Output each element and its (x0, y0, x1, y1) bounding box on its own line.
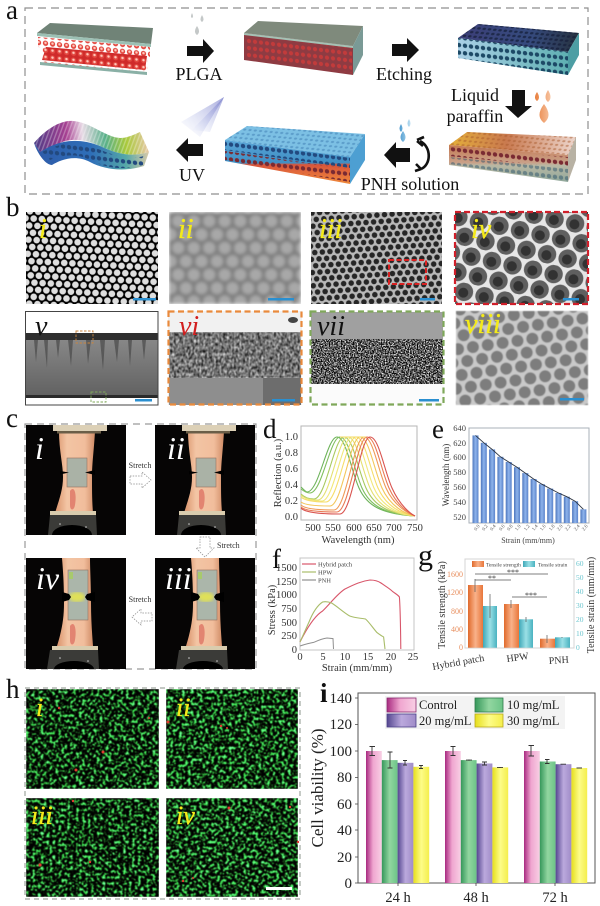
wavelength axis tick labels: 600 (453, 452, 466, 462)
left axis title: Tensile strength (kPa) (437, 561, 448, 649)
left axis tick labels: 1200 (447, 588, 463, 597)
right axis tick labels: 50 (576, 573, 584, 582)
viability legend (385, 696, 565, 729)
reflection axis tick labels: 1.0 (285, 432, 298, 443)
fluorescence image iii: iii (31, 801, 53, 830)
tensile legend: Tensile strength (486, 562, 521, 568)
error bars (370, 746, 582, 768)
x axis title: Strain (mm/mm) (501, 536, 555, 545)
significance markers: *** (507, 568, 519, 577)
time axis labels: 24 h (385, 890, 411, 906)
reflection axis tick labels: 0.4 (285, 480, 299, 491)
icon: paraffin drops (535, 90, 550, 123)
panel d label: d (263, 414, 277, 444)
photo i: i (35, 430, 44, 466)
arrow: liquid paraffin step (505, 90, 532, 118)
wavelength axis tick labels: 750 (407, 523, 423, 534)
strain axis tick labels: 1.8 (549, 524, 557, 532)
wavelength bars (472, 435, 586, 523)
reflection plot frame (301, 426, 417, 520)
viability axis tick labels: 80 (337, 770, 352, 786)
panel a dashed frame (25, 8, 588, 194)
schematic: opal template sandwich (37, 23, 153, 75)
icon: UV light rays (181, 97, 224, 137)
photo ii: ii (167, 430, 185, 466)
strain axis tick labels: 0.8 (507, 524, 515, 532)
label: PLGA: PLGA (175, 64, 223, 84)
arrow: PNH solution step (384, 142, 410, 168)
strain axis tick labels: 1.4 (532, 524, 540, 532)
time axis labels: 72 h (542, 890, 568, 906)
right axis tick labels: 30 (576, 601, 584, 610)
SEM image iv (455, 212, 588, 304)
stress legend: HPW (318, 570, 333, 576)
viability axis tick labels: 60 (337, 797, 352, 813)
SEM image i (26, 212, 158, 304)
significance markers: ** (488, 574, 496, 583)
strain axis tick labels: 25 (408, 652, 418, 663)
panel a: fabrication schematic (6, 0, 588, 194)
panel g label: g (418, 539, 433, 572)
right axis title: Tensile strain (mm/mm) (586, 557, 597, 653)
icon: PNH drops (400, 119, 410, 142)
reflection axis tick labels (285, 432, 299, 523)
PNH curve (300, 638, 334, 649)
icon: circular arrow (415, 137, 429, 171)
reflection axis tick labels: 0.2 (285, 496, 298, 507)
x axis title: Wavelength (nm) (322, 535, 395, 546)
wavelength axis tick labels: 550 (325, 523, 341, 534)
icon: PLGA drops (191, 13, 204, 35)
schematic: hybrid film (225, 126, 365, 184)
stress axis tick labels: 750 (281, 604, 297, 615)
viability axis tick labels: 140 (330, 691, 352, 707)
panel f label: f (272, 544, 281, 574)
stress axis tick labels (276, 563, 297, 656)
panel i: cell viability bar chart (308, 678, 595, 906)
SEM image i: i (39, 214, 47, 245)
label: Etching: Etching (376, 64, 432, 84)
y axis title: Stress (kPa) (267, 584, 278, 635)
SEM image ii: ii (178, 214, 194, 245)
significance markers (475, 568, 548, 600)
viability axis tick labels: 120 (330, 717, 352, 733)
tensile plot frame (465, 559, 574, 648)
panel h: live dead staining (6, 674, 300, 899)
arrow: PLGA step (187, 39, 214, 63)
y axis title: Wavelength (nm) (441, 444, 451, 506)
schematic: bent structural colour film (34, 121, 149, 169)
stretch label and arrow: i to ii: Stretch (129, 461, 151, 470)
SEM image viii (456, 309, 588, 405)
SEM image v: cross section: v (35, 311, 48, 342)
y axis title: Reflection (a.u.) (273, 438, 284, 507)
viability axis tick labels: 100 (330, 744, 352, 760)
reflection axis tick labels: 0.8 (285, 448, 298, 459)
wavelength axis tick labels: 520 (453, 512, 466, 522)
reflection axis tick labels: 0.6 (285, 464, 298, 475)
panel e label: e (432, 414, 444, 444)
strain axis tick labels: 10 (340, 652, 350, 663)
label: PNH solution: PNH solution (361, 174, 459, 194)
wavelength axis tick labels: 540 (453, 497, 466, 507)
right axis tick labels (576, 559, 584, 652)
SEM image vii: lower layer detail: vii (317, 311, 345, 342)
viability axis ticks (355, 698, 555, 886)
strain axis tick labels: 2.6 (582, 524, 590, 532)
strain axis tick labels: 20 (386, 652, 396, 663)
strain axis tick labels (297, 652, 418, 663)
schematic: paraffin filled film (449, 132, 576, 182)
photo ii (155, 425, 255, 535)
strain axis tick labels: 2.4 (574, 524, 582, 532)
SEM image v: cross section (26, 311, 158, 405)
left axis tick labels (447, 570, 463, 652)
bars 72 h (524, 751, 587, 883)
strain axis tick labels: 0.0 (474, 524, 482, 532)
strain axis tick labels: 2.0 (557, 524, 565, 532)
category labels (432, 651, 569, 673)
stretch label and arrow: i to ii (129, 461, 151, 488)
left axis tick labels: 800 (451, 607, 463, 616)
viability legend: 10 mg/mL (507, 698, 559, 712)
right axis tick labels: 10 (576, 629, 584, 638)
panel i label: i (320, 678, 328, 708)
photo iii: iii (165, 560, 192, 596)
photo iv: iv (36, 560, 60, 596)
HPW curve (300, 602, 385, 649)
right axis tick labels: 40 (576, 587, 584, 596)
panel g: tensile bar chart (418, 539, 597, 673)
arrow: etching step (392, 38, 419, 62)
panel b label: b (6, 192, 20, 222)
wavelength axis tick labels: 560 (453, 482, 466, 492)
strain axis tick labels: 0.6 (499, 524, 507, 532)
reflection axis tick labels: 0.0 (285, 512, 298, 523)
time axis labels: 48 h (463, 890, 489, 906)
right axis tick labels: 0 (576, 643, 580, 652)
category labels: HPW (506, 651, 530, 665)
wavelength axis tick labels: 650 (366, 523, 382, 534)
panel e: wavelength bar chart (432, 414, 590, 545)
stress axis tick labels: 1250 (276, 577, 297, 588)
panel c label: c (6, 403, 18, 433)
left axis tick labels: 1600 (447, 570, 463, 579)
wavelength axis tick labels: 600 (346, 523, 362, 534)
SEM image iii: iii (319, 214, 342, 245)
viability axis tick labels: 20 (337, 850, 352, 866)
stress plot frame (300, 558, 414, 650)
fluorescence image iv: iv (176, 801, 195, 830)
strain axis tick labels: 0.2 (482, 524, 490, 532)
SEM image iv: iv (471, 214, 492, 245)
photo iv (26, 558, 126, 669)
label: Liquid paraffin: Liquid (451, 85, 499, 105)
fluorescence image i: i (36, 693, 43, 722)
y axis title: Cell viability (%) (308, 729, 327, 847)
schematic: infiltrated template (244, 21, 363, 75)
stress axis tick labels: 0 (292, 645, 297, 656)
significance markers: *** (525, 591, 537, 600)
wavelength axis tick labels (453, 423, 466, 522)
fluorescence image iv (166, 798, 299, 897)
wavelength axis tick labels (305, 523, 423, 534)
category labels: Hybrid patch (432, 653, 485, 673)
left axis tick labels: 0 (459, 643, 463, 652)
tensile legend (472, 561, 568, 568)
viability legend: Control (419, 698, 458, 712)
schematic: inverse opal film (458, 24, 579, 75)
x axis title: Strain (mm/mm) (322, 663, 393, 674)
stress axis tick labels: 1500 (276, 563, 297, 574)
stress legend (302, 562, 353, 584)
stress axis tick labels: 1000 (276, 590, 297, 601)
SEM image vi: upper layer detail: vi (179, 311, 199, 342)
wavelength axis tick labels: 620 (453, 438, 466, 448)
SEM image ii (169, 212, 301, 304)
strain axis tick labels (474, 524, 590, 532)
panel b: electron microscopy images (6, 192, 588, 405)
viability axis tick labels (330, 691, 352, 892)
panel h dashed frame (25, 688, 300, 899)
fluorescence image i (26, 689, 159, 789)
SEM image iii (311, 212, 442, 304)
stretch label and arrow: ii to iii (196, 537, 240, 557)
SEM image vi: upper layer detail (168, 311, 302, 405)
strain axis tick labels: 15 (363, 652, 373, 663)
category labels: PNH (548, 655, 569, 667)
stretch label and arrow: iii to iv: Stretch (129, 595, 151, 604)
stress legend: Hybrid patch (318, 562, 353, 568)
stress axis tick labels: 500 (281, 618, 297, 629)
strain axis tick labels: 2.2 (565, 524, 573, 532)
wavelength trend line (476, 435, 583, 509)
SEM image vii: lower layer detail (310, 311, 444, 405)
spectra curves (301, 437, 415, 516)
SEM image viii: viii (465, 309, 501, 340)
label: UV: UV (179, 165, 205, 185)
wavelength axis tick labels: 500 (305, 523, 321, 534)
hybrid patch curve (300, 580, 401, 649)
tensile bars (468, 585, 570, 648)
right axis tick labels: 20 (576, 615, 584, 624)
strain axis tick labels: 1.0 (515, 524, 523, 532)
viability legend: 20 mg/mL (419, 714, 471, 728)
strain axis tick labels: 0.4 (490, 524, 498, 532)
bars 24 h (366, 751, 429, 883)
strain axis tick labels: 0 (297, 652, 303, 663)
fluorescence image ii: ii (176, 693, 190, 722)
viability legend: 30 mg/mL (507, 714, 559, 728)
time axis labels (385, 890, 568, 906)
stretch label and arrow: iii to iv (129, 595, 152, 625)
strain axis tick labels: 1.2 (524, 524, 532, 532)
right axis tick labels: 60 (576, 559, 584, 568)
panel f: stress strain curves (267, 544, 418, 674)
fluorescence image iii (26, 798, 159, 897)
wavelength axis tick labels: 700 (386, 523, 402, 534)
stress axis tick labels: 250 (281, 631, 297, 642)
strain axis tick labels: 1.6 (540, 524, 548, 532)
wavelength plot frame (469, 428, 589, 523)
panel h label: h (6, 674, 20, 704)
panel c: stretching photographs (6, 403, 256, 669)
strain axis tick labels: 5 (320, 652, 326, 663)
wavelength axis tick labels: 580 (453, 467, 466, 477)
viability axis tick labels: 40 (337, 823, 352, 839)
fluorescence image ii (166, 689, 298, 789)
viability plot frame (358, 693, 595, 883)
panel d: reflection spectra (263, 414, 423, 546)
left axis tick labels: 400 (451, 625, 463, 634)
arrow: UV step (176, 138, 203, 162)
tensile error bars (475, 579, 562, 643)
stretch label and arrow: ii to iii: Stretch (217, 541, 240, 550)
wavelength axis tick labels: 640 (453, 423, 466, 433)
viability axis tick labels: 0 (344, 876, 352, 892)
bars 48 h (445, 751, 508, 883)
tensile legend: Tensile strain (538, 562, 568, 568)
label: Liquid paraffin: paraffin (447, 106, 503, 126)
panel c dashed frame (25, 424, 256, 669)
stress legend: PNH (318, 578, 331, 584)
photo i (26, 425, 126, 535)
photo iii (155, 558, 255, 669)
